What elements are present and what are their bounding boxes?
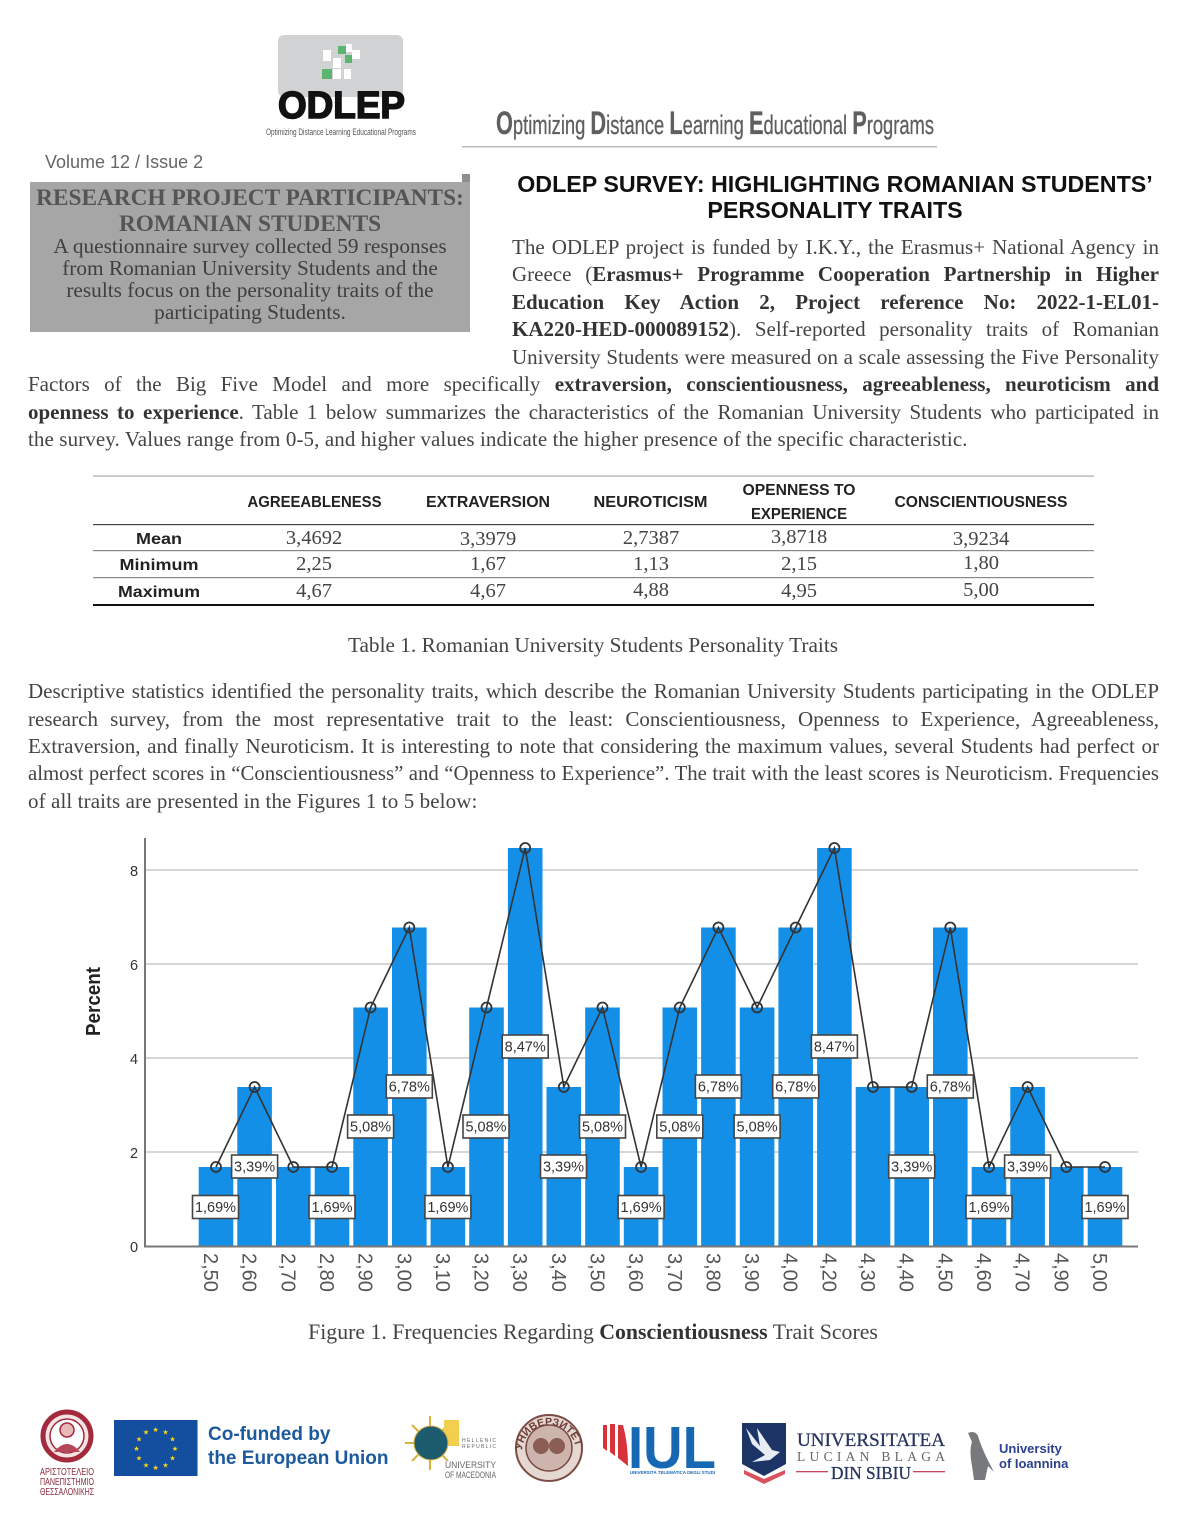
logo: Aristotle University of Thessaloniki bbox=[40, 1410, 94, 1498]
text: University of Ioannina: University bbox=[999, 1441, 1062, 1456]
x axis labels: 3,20 bbox=[470, 1253, 492, 1292]
text block: introduction: openness to experience. Table 1 below summarizes the characteristics of the Romanian University Students who participated in bbox=[28, 400, 1159, 424]
data labels bbox=[192, 1035, 1128, 1218]
text block: introduction: Greece (Erasmus+ Programme Cooperation Partnership in Higher bbox=[512, 262, 1159, 286]
x axis labels: 2,70 bbox=[276, 1253, 298, 1292]
text: co-funded by the European Union bbox=[208, 1424, 388, 1468]
table: personality traits: 2,15 bbox=[781, 553, 817, 575]
logo: Aristotle University of Thessaloniki: ΠΑΝΕΠΙΣΤΗΜΙΟ bbox=[40, 1477, 94, 1488]
y axis labels: 2 bbox=[130, 1146, 138, 1162]
x axis labels: 3,70 bbox=[663, 1253, 685, 1292]
panel body text: A questionnaire survey collected 59 responses bbox=[53, 234, 447, 258]
data labels: 3,39% bbox=[234, 1160, 275, 1176]
table: personality traits: 2,25 bbox=[296, 553, 332, 575]
x axis labels: 2,50 bbox=[199, 1253, 221, 1292]
x axis labels: 2,60 bbox=[238, 1253, 260, 1292]
logo: EU flag bbox=[114, 1420, 198, 1476]
x axis labels: 2,90 bbox=[354, 1253, 376, 1292]
logo: University of Macedonia: OF MACEDONIA bbox=[445, 1470, 496, 1481]
x axis labels: 3,60 bbox=[624, 1253, 646, 1292]
y axis labels bbox=[130, 864, 138, 1256]
logo: EU flag: ★ bbox=[162, 1428, 169, 1436]
data labels: 1,69% bbox=[427, 1200, 469, 1216]
x axis labels: 3,10 bbox=[431, 1253, 453, 1292]
x axis labels: 4,20 bbox=[817, 1253, 839, 1292]
table: personality traits: 1,80 bbox=[963, 552, 999, 574]
panel body text: results focus on the personality traits of the bbox=[66, 278, 434, 302]
table: personality traits: Maximum bbox=[118, 584, 200, 601]
title: PERSONALITY TRAITS bbox=[707, 197, 963, 223]
text block: introduction: KA220-HED-000089152). Self-reported personality traits of Romanian bbox=[512, 317, 1159, 341]
logo: EU flag: ★ bbox=[172, 1445, 178, 1453]
y axis labels: 8 bbox=[130, 864, 138, 880]
data labels: 5,08% bbox=[465, 1120, 507, 1136]
table: personality traits: 3,3979 bbox=[460, 528, 516, 550]
x axis labels: 3,80 bbox=[701, 1253, 723, 1292]
data labels: 3,39% bbox=[543, 1160, 584, 1176]
logo: university seal: УНИВЕРЗИТЕТ bbox=[514, 1418, 582, 1450]
text block: introduction: Factors of the Big Five Model and more specifically extraversion, conscientiousness, agreeableness, neuroticism and bbox=[28, 372, 1159, 396]
text: co-funded by the European Union: the European Union bbox=[208, 1448, 388, 1468]
x axis labels: 3,50 bbox=[586, 1253, 608, 1292]
text block: introduction: the survey. Values range from 0-5, and higher values indicate the higher presence of the specific characteristic. bbox=[28, 427, 968, 451]
data labels: 5,08% bbox=[737, 1120, 778, 1136]
logo: EU flag: ★ bbox=[143, 1462, 149, 1470]
text block: descriptive statistics: Descriptive statistics identified the personality traits, which describe the Romanian University Students participating in the ODLEP bbox=[28, 679, 1159, 703]
logo: University of Macedonia: UNIVERSITY bbox=[445, 1460, 497, 1471]
logo: ODLEP bbox=[266, 35, 416, 137]
data labels: 5,08% bbox=[659, 1120, 700, 1136]
data labels: 3,39% bbox=[1007, 1160, 1048, 1176]
title: ODLEP SURVEY: HIGHLIGHTING ROMANIAN STUDENTS’ bbox=[517, 171, 1153, 197]
data labels: 6,78% bbox=[389, 1080, 430, 1096]
panel heading: RESEARCH PROJECT PARTICIPANTS: bbox=[36, 185, 464, 211]
text: Universitatea Lucian Blaga din Sibiu: LUCIAN BLAGA bbox=[797, 1449, 945, 1464]
panel body text bbox=[53, 234, 447, 324]
x axis labels: 4,40 bbox=[895, 1253, 917, 1292]
panel body text: participating Students. bbox=[154, 300, 346, 324]
data labels: 6,78% bbox=[698, 1080, 739, 1096]
table: personality traits: 4,67 bbox=[296, 580, 332, 602]
logo: University of Macedonia: REPUBLIC bbox=[462, 1444, 496, 1450]
x axis labels: 2,80 bbox=[315, 1253, 337, 1292]
text: Universitatea Lucian Blaga din Sibiu: UNIVERSITATEA bbox=[797, 1430, 945, 1451]
data labels: 1,69% bbox=[968, 1200, 1010, 1216]
table: personality traits: CONSCIENTIOUSNESS bbox=[894, 494, 1068, 511]
logo: EU flag: ★ bbox=[153, 1426, 159, 1434]
x axis labels: 3,40 bbox=[547, 1253, 569, 1292]
logo: ODLEP: ODLEP bbox=[278, 85, 405, 127]
table: personality traits: Minimum bbox=[120, 557, 198, 574]
logo: IUL: UNIVERSITÀ TELEMATICA DEGLI STUDI bbox=[630, 1469, 715, 1475]
table: personality traits: 3,9234 bbox=[953, 528, 1009, 550]
text block: descriptive statistics: research survey, from the most representative trait to the least: Conscientiousness, Openness to Experience, Agreeableness, bbox=[28, 707, 1159, 731]
table: personality traits bbox=[93, 476, 1094, 606]
panel heading: ROMANIAN STUDENTS bbox=[119, 210, 381, 236]
x axis labels: 4,00 bbox=[779, 1253, 801, 1292]
text block: descriptive statistics bbox=[28, 679, 1159, 813]
volume and issue: Volume 12 / Issue 2 bbox=[45, 152, 203, 172]
logo: ODLEP: Optimizing Distance Learning Educational Programs bbox=[266, 127, 416, 137]
data labels: 1,69% bbox=[195, 1200, 236, 1216]
text block: introduction: The ODLEP project is funded by I.K.Y., the Erasmus+ National Agency in bbox=[512, 235, 1159, 259]
logo: owl bbox=[968, 1432, 994, 1480]
text: Universitatea Lucian Blaga din Sibiu: DIN SIBIU bbox=[831, 1463, 911, 1483]
table: personality traits: 1,13 bbox=[633, 553, 669, 575]
y axis labels: 4 bbox=[130, 1052, 138, 1068]
text block: introduction: Education Key Action 2, Project reference No: 2022-1-EL01- bbox=[512, 290, 1159, 314]
data labels: 1,69% bbox=[621, 1200, 662, 1216]
text: Universitatea Lucian Blaga din Sibiu bbox=[796, 1430, 946, 1483]
logo: EU flag: ★ bbox=[153, 1464, 159, 1472]
logo: University of Macedonia: HELLENIC bbox=[462, 1438, 496, 1444]
logo: EU flag: ★ bbox=[133, 1445, 140, 1453]
table: personality traits: NEUROTICISM bbox=[594, 494, 708, 511]
x axis labels: 3,30 bbox=[508, 1253, 530, 1292]
x axis labels: 4,50 bbox=[933, 1253, 955, 1292]
x axis labels: 4,70 bbox=[1011, 1253, 1033, 1292]
y axis title: Percent bbox=[83, 967, 105, 1036]
table: personality traits: 5,00 bbox=[963, 579, 999, 601]
table: personality traits: AGREEABLENESS bbox=[248, 494, 382, 511]
panel heading bbox=[36, 185, 464, 236]
text block: descriptive statistics: Extraversion, and finally Neuroticism. It is interesting to note that considering the maximum values, several Students had perfect or bbox=[28, 734, 1159, 758]
panel body text: from Romanian University Students and the bbox=[62, 256, 438, 280]
y axis labels: 0 bbox=[130, 1240, 138, 1256]
data labels: 3,39% bbox=[891, 1160, 932, 1176]
data labels: 6,78% bbox=[775, 1080, 816, 1096]
x axis labels: 4,60 bbox=[972, 1253, 994, 1292]
logo: EU flag: ★ bbox=[136, 1454, 142, 1462]
logo: Aristotle University of Thessaloniki: ΘΕΣΣΑΛΟΝΙΚΗΣ bbox=[40, 1487, 94, 1498]
table caption: Table 1. Romanian University Students Personality Traits bbox=[348, 633, 838, 657]
logo: IUL: IUL bbox=[628, 1415, 716, 1481]
x axis labels: 5,00 bbox=[1088, 1253, 1110, 1292]
title bbox=[517, 171, 1153, 223]
text: University of Ioannina: of Ioannina bbox=[999, 1456, 1068, 1471]
panel: research project participants bbox=[30, 174, 470, 332]
y axis labels: 6 bbox=[130, 958, 138, 974]
data labels: 5,08% bbox=[350, 1120, 391, 1136]
table: personality traits: OPENNESS TO bbox=[742, 482, 856, 499]
data labels: 6,78% bbox=[930, 1080, 971, 1096]
x axis labels: 4,90 bbox=[1049, 1253, 1071, 1292]
logo: EU flag: ★ bbox=[162, 1462, 169, 1470]
text: co-funded by the European Union: Co-funded by bbox=[208, 1424, 330, 1445]
text block: introduction bbox=[28, 235, 1159, 451]
table: personality traits: 4,88 bbox=[633, 579, 669, 601]
x axis labels: 4,30 bbox=[856, 1253, 878, 1292]
table: personality traits: 4,95 bbox=[781, 580, 817, 602]
text block: descriptive statistics: almost perfect scores in “Conscientiousness” and “Openness to Experience”. The trait with the least scores is Neuroticism. Frequencies bbox=[28, 762, 1159, 785]
data labels: 8,47% bbox=[814, 1040, 855, 1056]
table: personality traits: 4,67 bbox=[470, 580, 506, 602]
data labels: 5,08% bbox=[582, 1120, 623, 1136]
logo: EU flag: ★ bbox=[143, 1428, 149, 1436]
logo: Aristotle University of Thessaloniki: ΑΡΙΣΤΟΤΕΛΕΙΟ bbox=[40, 1467, 94, 1478]
table: personality traits: 2,7387 bbox=[623, 527, 679, 549]
logo: EU flag: ★ bbox=[169, 1454, 176, 1462]
x axis labels: 3,00 bbox=[392, 1253, 414, 1292]
table: personality traits: Mean bbox=[136, 531, 182, 548]
data labels: 8,47% bbox=[505, 1040, 546, 1056]
text block: introduction: University Students were measured on a scale assessing the Five Personality bbox=[512, 345, 1159, 369]
logo: university seal bbox=[514, 1414, 583, 1482]
table: personality traits: 3,4692 bbox=[286, 527, 342, 549]
line series bbox=[211, 843, 1110, 1172]
logo: EU flag: ★ bbox=[136, 1436, 142, 1444]
table: personality traits: EXPERIENCE bbox=[751, 506, 847, 523]
table: personality traits: 3,8718 bbox=[771, 526, 827, 548]
text block: descriptive statistics: of all traits are presented in the Figures 1 to 5 below: bbox=[28, 789, 477, 813]
bars bbox=[199, 848, 1122, 1246]
text: University of Ioannina bbox=[999, 1441, 1068, 1471]
table: personality traits: 1,67 bbox=[470, 553, 506, 575]
figure caption: Figure 1. Frequencies Regarding Conscientiousness Trait Scores bbox=[308, 1320, 878, 1344]
tagline: Optimizing Distance Learning Educational Programs: Optimizing Distance Learning Educational Programs bbox=[496, 105, 934, 141]
logo: EU flag: ★ bbox=[169, 1436, 176, 1444]
table: personality traits: EXTRAVERSION bbox=[426, 494, 550, 511]
data labels: 1,69% bbox=[311, 1200, 353, 1216]
logo: shield Lucian Blaga bbox=[742, 1423, 786, 1484]
x axis labels bbox=[199, 1253, 1110, 1292]
bar chart: conscientiousness frequencies bbox=[83, 838, 1138, 1292]
x axis labels: 3,90 bbox=[740, 1253, 762, 1292]
logo: University of Macedonia bbox=[405, 1416, 497, 1481]
data labels: 1,69% bbox=[1084, 1200, 1126, 1216]
